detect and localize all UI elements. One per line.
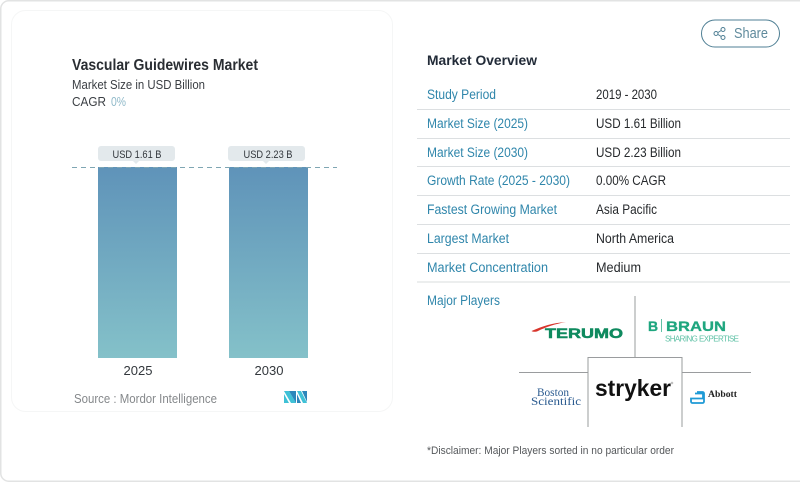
row: study period: 2019 - 2030 (596, 87, 657, 102)
row: market concentration: Medium (596, 260, 641, 275)
value label: 2030 (228, 146, 305, 164)
CAGR label: 0% (111, 94, 126, 109)
logo: Boston Scientific (531, 385, 581, 408)
row: market size 2030 (427, 145, 681, 160)
row: largest market: Largest Market (427, 231, 509, 246)
bar chart (72, 146, 337, 378)
icon: Mordor Intelligence logo (284, 391, 307, 403)
icon: share (714, 28, 725, 40)
share button (702, 20, 780, 47)
logo: Abbott: Abbott (708, 389, 737, 399)
value label: 2025: USD 1.61 B (112, 149, 162, 161)
row: market size 2030: Market Size (2030) (427, 145, 528, 160)
logo: Boston Scientific: Scientific (531, 394, 581, 408)
row: study period (427, 87, 657, 102)
logo: Abbott (691, 389, 737, 403)
row: growth rate: 0.00% CAGR (596, 173, 666, 188)
logo: B Braun: SHARING EXPERTISE (665, 334, 739, 344)
table: market overview (417, 87, 790, 282)
CAGR label: CAGR (72, 94, 106, 109)
share button: Share (734, 25, 768, 42)
logo: Stryker: stryker (595, 375, 671, 401)
bar: 2030 (229, 167, 308, 358)
disclaimer: *Disclaimer: Major Players sorted in no particular order (427, 445, 674, 457)
bar: 2025 (98, 167, 177, 358)
heading: market overview: Market Overview (427, 52, 537, 68)
logo: B Braun (648, 318, 739, 344)
logo: Terumo (532, 322, 623, 341)
row: largest market: North America (596, 231, 674, 246)
row: growth rate (427, 173, 666, 188)
row: fastest growing market (427, 202, 657, 217)
logo: B Braun: BRAUN (666, 318, 726, 334)
row: study period: Study Period (427, 87, 496, 102)
axis label: 2030: 2030 (255, 363, 283, 378)
logo: Boston Scientific: Boston (537, 385, 569, 399)
row: market concentration (427, 260, 641, 275)
row: market concentration: Market Concentration (427, 260, 548, 275)
value label: 2025 (98, 146, 175, 164)
source: Source : Mordor Intelligence (74, 392, 217, 406)
chart title: Vascular Guidewires Market (72, 57, 258, 74)
axis label: 2025: 2025 (124, 363, 152, 378)
row: growth rate: Growth Rate (2025 - 2030) (427, 173, 570, 188)
chart subtitle: Market Size in USD Billion (72, 77, 205, 92)
panel: chart (12, 10, 392, 412)
major players grid (519, 296, 751, 427)
row: market size 2025 (427, 116, 681, 131)
logo: B Braun: B (648, 318, 658, 334)
heading: major players: Major Players (427, 293, 500, 308)
logo: Terumo: TERUMO (545, 326, 623, 341)
CAGR label (72, 94, 126, 109)
row: market size 2030: USD 2.23 Billion (596, 145, 681, 160)
row: largest market (427, 231, 674, 246)
row: fastest growing market: Asia Pacific (596, 202, 657, 217)
row: market size 2025: USD 1.61 Billion (596, 116, 681, 131)
value label: 2030: USD 2.23 B (244, 149, 292, 161)
row: fastest growing market: Fastest Growing Market (427, 202, 557, 217)
row: market size 2025: Market Size (2025) (427, 116, 528, 131)
